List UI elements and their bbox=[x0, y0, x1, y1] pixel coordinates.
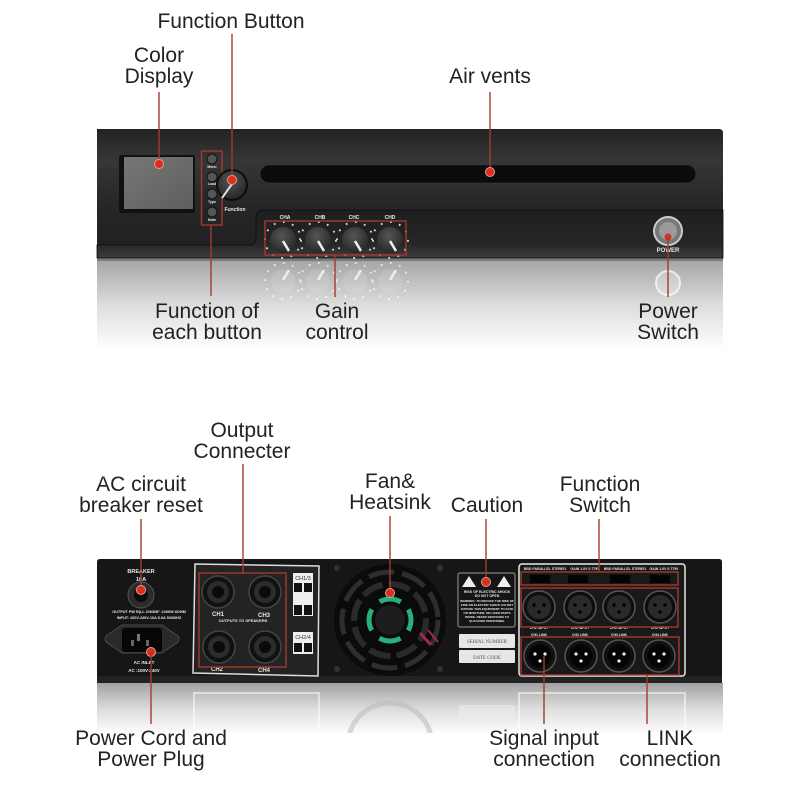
function switches bbox=[521, 567, 679, 585]
power inlet bbox=[105, 625, 179, 673]
power button bbox=[654, 217, 682, 254]
callout: AC circuit breaker reset bbox=[79, 473, 203, 594]
breaker bbox=[127, 569, 155, 608]
date code label: DATE CODE bbox=[473, 656, 501, 661]
callout: output connecter bbox=[194, 419, 290, 573]
channel polarity labels bbox=[293, 573, 313, 654]
serial number label: SERIAL NUMBER bbox=[467, 640, 508, 645]
callout: caution: Caution bbox=[451, 494, 523, 517]
color display bbox=[119, 155, 195, 213]
callout: color display: Color bbox=[134, 44, 184, 67]
function buttons bbox=[202, 151, 222, 225]
power inlet: AC INLET bbox=[134, 660, 155, 665]
rated output text: OUTPUT PW R(LL CH/8NF :1200W 8OHM bbox=[112, 610, 186, 614]
callout: output connecter: Connecter bbox=[194, 440, 290, 463]
rear chassis bbox=[97, 559, 722, 683]
callout: air vents: Air vents bbox=[449, 65, 531, 88]
function switches: BRD PARALLEL STEREO bbox=[524, 567, 566, 571]
callout: function switch: Switch bbox=[569, 494, 631, 517]
breaker: 10A bbox=[136, 577, 146, 583]
gain knobs: CHD bbox=[385, 215, 396, 221]
caution label: INSIDE. REFER SERVICING TO bbox=[465, 615, 510, 619]
callout: AC circuit breaker reset: breaker reset bbox=[79, 494, 203, 517]
caution label: QUALIFIED PERSONNEL bbox=[469, 619, 505, 623]
air vent slot bbox=[260, 165, 696, 183]
gain knobs bbox=[265, 215, 408, 258]
function buttons: Load bbox=[208, 182, 216, 186]
callout: output connecter: Output bbox=[210, 419, 274, 442]
function buttons: Menu bbox=[207, 165, 217, 169]
callout: gain control bbox=[305, 255, 369, 344]
callout: function button: Function Button bbox=[157, 10, 305, 33]
callout: function switch bbox=[560, 473, 640, 572]
callout: AC circuit breaker reset: AC circuit bbox=[96, 473, 186, 496]
XLR link outputs: CH3 LINK bbox=[611, 633, 628, 637]
bottom lip bbox=[97, 676, 722, 683]
channel polarity labels: CH2/4 bbox=[295, 635, 311, 641]
output connector plate bbox=[193, 564, 319, 676]
XLR inputs: CH4 INPUT bbox=[651, 626, 670, 630]
function switches: GAIN 1.0V 0.775V bbox=[650, 567, 679, 571]
gain knobs: CHB bbox=[315, 215, 326, 221]
callout: LINK connection: LINK bbox=[647, 727, 693, 750]
panel: front view of amplifier bbox=[97, 129, 723, 350]
function buttons: Mute bbox=[208, 218, 216, 222]
XLR link outputs: CH4 LINK bbox=[652, 633, 669, 637]
output connector plate: CH3 bbox=[258, 613, 271, 619]
XLR inputs: CH2 INPUT bbox=[571, 626, 590, 630]
function knob: Function bbox=[224, 207, 246, 213]
callout: signal input connection: Signal input bbox=[489, 727, 599, 750]
cooling fan bbox=[334, 564, 446, 676]
XLR link outputs: CH2 LINK bbox=[572, 633, 589, 637]
callout: power switch: Power bbox=[638, 300, 698, 323]
XLR inputs: CH1 INPUT bbox=[530, 626, 549, 630]
gain knobs: CHA bbox=[280, 215, 291, 221]
rated output text bbox=[112, 610, 186, 620]
XLR inputs bbox=[521, 588, 678, 630]
callout: function of each button bbox=[152, 225, 262, 344]
input plate bbox=[519, 564, 685, 676]
channel polarity labels: CH1/3 bbox=[295, 576, 311, 582]
function switches: GAIN 1.0V 0.775V bbox=[570, 567, 600, 571]
caution label: DO NOT OPEN bbox=[475, 594, 500, 598]
callout: LINK connection: connection bbox=[619, 748, 721, 771]
caution label: RISK OF ELECTRIC SHOCK bbox=[464, 590, 511, 594]
callout: air vents bbox=[449, 65, 531, 176]
function knob bbox=[216, 169, 248, 213]
callout: power cord and plug: Power Plug bbox=[97, 748, 205, 771]
callout: fan and heatsink bbox=[349, 470, 431, 598]
callout: fan and heatsink: Heatsink bbox=[349, 491, 431, 514]
function switches: BRD PARALLEL STEREO bbox=[604, 567, 646, 571]
caution label: OR MOISTURE. NO USER PARTS bbox=[463, 611, 511, 615]
callout: function button bbox=[157, 10, 305, 184]
panel: rear view of amplifier bbox=[97, 559, 723, 733]
callout: power switch: Switch bbox=[637, 321, 699, 344]
date code label bbox=[459, 650, 515, 663]
callout: color display bbox=[125, 44, 194, 168]
output connector plate: CH1 bbox=[212, 612, 225, 618]
XLR inputs: CH3 INPUT bbox=[610, 626, 629, 630]
callout: power cord and plug bbox=[75, 648, 227, 771]
function buttons: Type bbox=[208, 200, 216, 204]
power button: POWER bbox=[657, 248, 680, 254]
caution label: EXPOSE THIS EQUIPMENT TO RAIN bbox=[461, 607, 513, 611]
callout: power cord and plug: Power Cord and bbox=[75, 727, 227, 750]
callout: gain control: Gain bbox=[315, 300, 359, 323]
output connector plate: OUTPUTS TO SPEAKERS bbox=[219, 618, 268, 623]
callout: fan and heatsink: Fan& bbox=[365, 470, 415, 493]
XLR link outputs bbox=[521, 633, 679, 675]
callout: function of each button: each button bbox=[152, 321, 262, 344]
output connector plate: CH4 bbox=[258, 668, 271, 674]
callout: gain control: control bbox=[305, 321, 369, 344]
callout: color display: Display bbox=[125, 65, 194, 88]
rated output text: INPUT: 100V-240V-10A 5.0A 50/60HZ bbox=[117, 616, 182, 620]
output connector plate: CH2 bbox=[211, 667, 224, 673]
callout: function switch: Function bbox=[560, 473, 640, 496]
caution label: WARNING: TO REDUCE THE RISK OF bbox=[460, 599, 514, 603]
caution label: FIRE OR ELECTRIC SHOCK DO NOT bbox=[461, 603, 513, 607]
callout: signal input connection bbox=[489, 656, 599, 771]
callout: LINK connection bbox=[619, 675, 721, 771]
front reflection bbox=[97, 258, 723, 350]
callout: function of each button: Function of bbox=[155, 300, 259, 323]
serial number label bbox=[459, 634, 515, 648]
XLR link outputs: CH1 LINK bbox=[531, 633, 548, 637]
callout: power switch bbox=[637, 234, 699, 344]
rear reflection bbox=[97, 683, 723, 733]
front chassis bbox=[97, 129, 723, 258]
lower front band bbox=[97, 210, 723, 258]
callout: caution bbox=[451, 494, 523, 586]
gain knobs: CHC bbox=[349, 215, 360, 221]
breaker: BREAKER bbox=[127, 569, 155, 575]
callout: signal input connection: connection bbox=[493, 748, 595, 771]
power inlet: AC :100V-240V bbox=[128, 668, 160, 673]
caution label bbox=[458, 573, 515, 627]
